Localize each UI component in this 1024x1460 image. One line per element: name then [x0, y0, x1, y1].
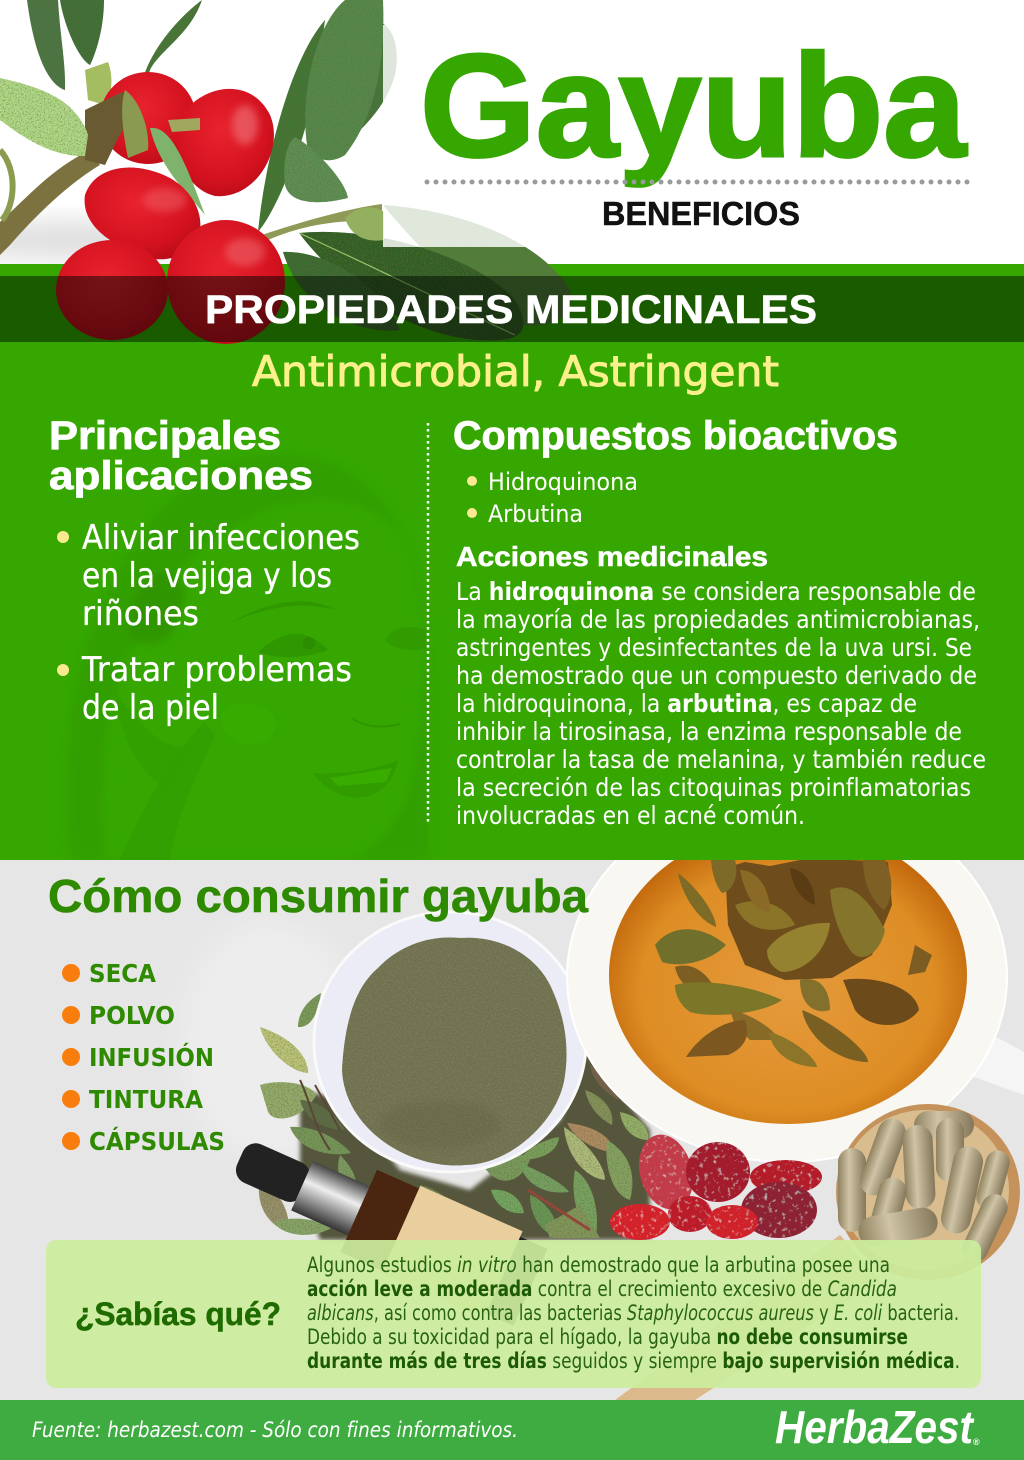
footer bar — [0, 1400, 1024, 1460]
consumption forms list: TINTURA — [89, 1085, 204, 1114]
upper left leaves — [27, 0, 202, 95]
soft shadow under plant — [0, 222, 200, 258]
callout text: durante más de tres días seguidos y siempre bajo supervisión médica. — [307, 1349, 960, 1373]
white translucent title overlay — [383, 25, 1024, 247]
compounds list: Hidroquinona — [488, 468, 638, 496]
upper right leaves — [258, 0, 397, 232]
paragraph: La hidroquinona se considera responsable de — [456, 577, 976, 606]
pale leaf — [0, 78, 88, 156]
callout text: acción leve a moderada contra el crecimiento excesivo de Candida — [307, 1277, 897, 1301]
consumption forms list: CÁPSULAS — [89, 1127, 225, 1156]
callout text: Debido a su toxicidad para el hígado, la gayuba no debe consumirse — [307, 1325, 908, 1349]
logo: HerbaZest — [775, 1401, 974, 1453]
consumption forms list: SECA — [89, 959, 157, 988]
callout text: albicans, así como contra las bacterias Staphylococcus aureus y E. coli bacteria. — [307, 1301, 959, 1325]
source note: Fuente: herbazest.com - Sólo con fines informativos. — [32, 1418, 518, 1442]
lower right leaves — [262, 204, 571, 340]
dropper bottle — [220, 1114, 550, 1331]
properties line: Antimicrobial, Astringent — [252, 347, 779, 396]
branch — [0, 150, 100, 255]
heading: Principales — [49, 414, 281, 458]
applications list: Aliviar infecciones — [82, 518, 360, 558]
green main panel — [0, 264, 1024, 860]
applications list: Tratar problemas — [81, 650, 352, 690]
compounds list — [467, 468, 638, 528]
paragraph: involucradas en el acné común. — [456, 801, 805, 830]
logo: ® — [973, 1437, 980, 1447]
did you know callout — [46, 1240, 981, 1388]
heap of dried leaves — [259, 993, 650, 1240]
applications list — [57, 518, 360, 728]
column: principales aplicaciones — [49, 414, 360, 728]
subtitle: BENEFICIOS — [602, 195, 800, 232]
paragraph: la secreción de las citoquinas proinflamatorias — [456, 773, 971, 802]
powder bowl — [314, 912, 586, 1172]
dotted divider — [427, 180, 968, 184]
applications list: en la vejiga y los — [82, 556, 332, 596]
plant photo: uva ursi branch with berries — [0, 0, 571, 344]
applications list: de la piel — [82, 688, 219, 728]
consumption forms list — [62, 959, 225, 1156]
consumption forms list: POLVO — [89, 1001, 175, 1030]
heading: Compuestos bioactivos — [453, 414, 898, 458]
applications list: riñones — [82, 594, 199, 634]
column: compuestos bioactivos — [453, 414, 986, 830]
dried red berries — [610, 1129, 822, 1240]
heading — [49, 414, 313, 498]
tea leaves — [655, 860, 932, 1067]
grey lower panel — [0, 860, 1024, 1400]
paragraph: la hidroquinona, la arbutina, es capaz de — [456, 689, 917, 718]
callout heading: ¿Sabías qué? — [75, 1296, 281, 1332]
paragraph — [456, 577, 986, 830]
dark title band — [0, 276, 1024, 342]
title: Gayuba — [420, 24, 968, 187]
tea cup — [566, 860, 1024, 1162]
callout text: Algunos estudios in vitro han demostrado que la arbutina posee una — [307, 1253, 890, 1277]
paragraph: inhibir la tirosinasa, la enzima responsable de — [456, 717, 962, 746]
callout text — [307, 1253, 960, 1373]
how to consume heading: Cómo consumir gayuba — [48, 870, 588, 922]
berries — [100, 72, 274, 196]
heading: aplicaciones — [49, 454, 313, 498]
consumption forms list: INFUSIÓN — [89, 1042, 214, 1072]
subheading: Acciones medicinales — [456, 541, 768, 572]
section heading: PROPIEDADES MEDICINALES — [205, 288, 817, 332]
header background — [0, 0, 1024, 264]
compounds list: Arbutina — [488, 500, 583, 528]
face watermark — [66, 455, 428, 860]
wooden spoon with capsules — [615, 1104, 1020, 1400]
